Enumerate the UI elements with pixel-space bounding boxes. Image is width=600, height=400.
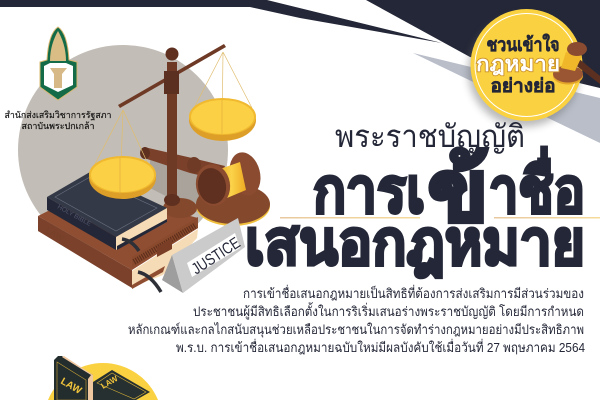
justice sign	[162, 218, 245, 293]
badge	[468, 9, 600, 127]
illustration: bottom law book: LAW	[44, 225, 66, 244]
yellow circle and law books	[48, 356, 158, 400]
main heading	[245, 144, 585, 278]
logo	[40, 27, 77, 100]
organisation name: สำนักส่งเสริมวิชาการรัฐสภา	[4, 110, 112, 121]
badge: กฎหมาย	[476, 53, 560, 76]
illustration: top holy bible book: HOLY BIBLE	[56, 204, 93, 228]
justice sign: JUSTICE	[189, 235, 244, 278]
body paragraph	[128, 284, 585, 355]
illustration: gavel	[140, 147, 270, 226]
badge: อย่างย่อ	[490, 76, 556, 97]
badge gavel icon	[553, 42, 600, 84]
illustration: scale stand	[118, 44, 226, 218]
illustration: top holy bible book	[47, 172, 167, 251]
subtitle: พระราชบัญญัติ	[335, 119, 525, 154]
top banner shapes	[0, 0, 600, 143]
illustration: scale pans	[89, 52, 256, 199]
heading line rules	[280, 217, 600, 218]
main heading: ข้	[428, 144, 488, 238]
badge: ชวนเข้าใจ	[486, 33, 560, 56]
illustration: bottom law book	[38, 190, 198, 292]
main heading: าชื่อ	[489, 147, 585, 226]
organisation name	[4, 110, 112, 131]
main heading: การเ	[313, 157, 425, 226]
yellow circle and law books: LAW	[100, 374, 120, 391]
organisation name: สถาบันพระปกเกล้า	[22, 121, 94, 131]
yellow circle and law books: LAW	[58, 376, 84, 397]
grey backdrop circle	[18, 45, 228, 255]
